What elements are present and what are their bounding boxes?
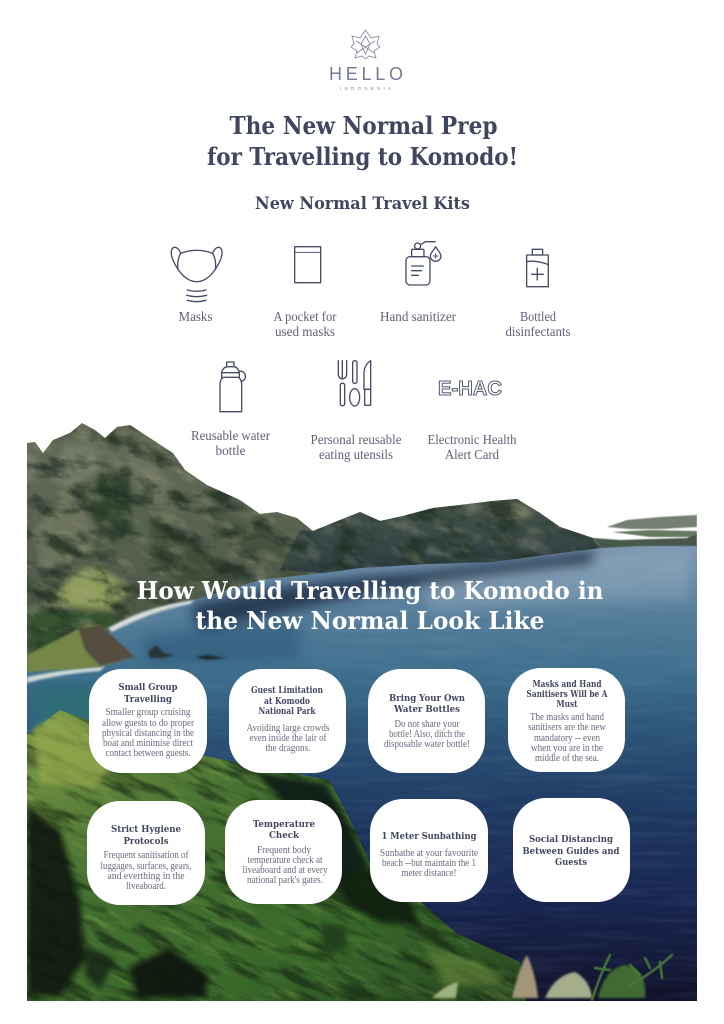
logo: Hello Indonesia xyxy=(329,30,403,91)
card: Bring Your Own Water Bottles: Bring Your Own xyxy=(389,693,465,704)
card: Bring Your Own Water Bottles xyxy=(368,669,485,773)
card: Small Group Travelling: physical distancing in the xyxy=(102,728,194,739)
water xyxy=(27,545,697,1001)
logo: Hello Indonesia: INDONESIA xyxy=(340,86,391,91)
icon: bottled disinfectant xyxy=(527,249,548,287)
heading: New Normal Travel Kits: New Normal Travel Kits xyxy=(255,194,470,213)
label: Reusable water bottle: bottle xyxy=(216,443,246,458)
card: Temperature Check: Check xyxy=(269,830,299,841)
label: Personal reusable eating utensils xyxy=(310,432,402,462)
heading: How Would Travelling to Komodo in the New Normal Look Like xyxy=(136,576,604,635)
card: Small Group Travelling: contact between guests. xyxy=(106,748,190,759)
logo: Hello Indonesia: HELLO xyxy=(329,64,403,84)
main mountain range xyxy=(27,423,600,670)
icon: eating utensils xyxy=(338,361,371,406)
label: Bottled disinfectants: disinfectants xyxy=(506,324,570,339)
card: Masks and Hand Sanitisers: Must xyxy=(556,699,578,710)
card: Social Distancing xyxy=(513,798,630,902)
label: Reusable water bottle: Reusable water xyxy=(191,428,270,443)
card: Temperature Check: Temperature xyxy=(253,819,315,830)
photo: Padar island landscape xyxy=(27,423,697,1001)
label: Electronic Health Alert Card xyxy=(428,432,517,462)
heading: How Would Travelling to Komodo in the New Normal Look Like: the New Normal Look Like xyxy=(196,606,544,635)
card: Strict Hygiene Protocols: and everthing in the xyxy=(108,871,185,882)
icon: lotus star xyxy=(351,30,380,59)
label: Hand sanitizer: Hand sanitizer xyxy=(380,309,456,324)
card: Social Distancing: Social Distancing xyxy=(529,834,613,845)
label: pocket for used masks: used masks xyxy=(275,324,335,339)
card: Small Group Travelling: boat and minimise direct xyxy=(103,738,193,749)
label: pocket for used masks: A pocket for xyxy=(274,309,337,324)
card: Guest Limitation: even inside the lair of xyxy=(250,733,327,744)
label: Bottled disinfectants xyxy=(506,309,570,339)
label: Masks: Masks xyxy=(178,309,212,324)
label: Personal reusable eating utensils: eating utensils xyxy=(319,447,393,462)
card: 1 Meter Sunbathing: 1 Meter Sunbathing xyxy=(382,831,477,842)
card: Guest Limitation: at Komodo xyxy=(264,696,310,707)
card: 1 Meter Sunbathing: Sunbathe at your favourite xyxy=(380,848,479,859)
icon: hand sanitizer xyxy=(406,242,441,285)
far islands xyxy=(593,515,697,548)
card: Temperature Check: temperature check at xyxy=(248,855,323,866)
card: Strict Hygiene Protocols: liveaboard. xyxy=(126,881,166,892)
beach xyxy=(108,600,195,632)
card: Small Group Travelling: Smaller group cruising xyxy=(106,707,190,718)
card: Masks and Hand Sanitisers xyxy=(508,668,625,772)
card: Strict Hygiene Protocols: Frequent sanitisation of xyxy=(104,850,189,861)
card: Strict Hygiene Protocols xyxy=(87,801,205,905)
card: Strict Hygiene Protocols: Protocols xyxy=(124,836,168,847)
card: Masks and Hand Sanitisers: when you are in the xyxy=(531,743,604,754)
right ridge shadow xyxy=(280,499,600,573)
mountain shading xyxy=(27,423,600,670)
card: Small Group Travelling: allow guests to do proper xyxy=(102,718,195,729)
card: Bring Your Own Water Bottles: disposable water bottle! xyxy=(384,739,470,750)
label: pocket for used masks xyxy=(274,309,337,339)
card: Small Group Travelling xyxy=(89,669,207,773)
card: Bring Your Own Water Bottles: Do not share your xyxy=(394,719,460,730)
card: Small Group Travelling: Travelling xyxy=(124,694,172,705)
title xyxy=(207,111,518,171)
label: Reusable water bottle xyxy=(191,428,270,458)
card: Temperature Check: national park's gates. xyxy=(247,875,323,886)
card: Guest Limitation xyxy=(229,669,346,773)
label: Bottled disinfectants: Bottled xyxy=(520,309,556,324)
card: 1 Meter Sunbathing xyxy=(370,799,488,902)
card: Guest Limitation: Avoiding large crowds xyxy=(246,723,330,734)
card: Temperature Check: Frequent body xyxy=(257,845,311,856)
hillside shadows and rocks xyxy=(27,716,505,998)
card: Bring Your Own Water Bottles: bottle! Also, ditch the xyxy=(389,729,465,740)
label: Electronic Health Alert Card: Alert Card xyxy=(445,447,499,462)
label: Personal reusable eating utensils: Personal reusable xyxy=(310,432,402,447)
card: Temperature Check xyxy=(225,800,342,904)
card: Masks and Hand Sanitisers: sanitisers are the new xyxy=(528,722,607,733)
card: 1 Meter Sunbathing: beach --but maintain the 1 xyxy=(382,858,476,869)
icon: E-HAC: E-HAC xyxy=(438,378,502,400)
label: Electronic Health Alert Card: Electronic Health xyxy=(428,432,517,447)
headland xyxy=(27,624,227,672)
heading: How Would Travelling to Komodo in the New Normal Look Like: How Would Travelling to Komodo in xyxy=(136,576,604,605)
card: Masks and Hand Sanitisers: Masks and Hand xyxy=(532,679,602,690)
foreground ferns xyxy=(432,955,672,1000)
card: Masks and Hand Sanitisers: The masks and hand xyxy=(530,712,604,723)
green foreground hillside xyxy=(27,710,526,1001)
card: Social Distancing: Guests xyxy=(555,857,587,868)
card: Guest Limitation: the dragons. xyxy=(266,743,310,754)
card: Strict Hygiene Protocols: luggages, surfaces, gears, xyxy=(100,861,192,872)
icon: reusable water bottle xyxy=(220,362,245,412)
card: Strict Hygiene Protocols: Strict Hygiene xyxy=(111,824,181,835)
card: Masks and Hand Sanitisers: mandatory -- even xyxy=(534,733,600,744)
icon: pocket xyxy=(295,247,321,283)
icon: mask xyxy=(171,247,222,302)
card: 1 Meter Sunbathing: meter distance! xyxy=(402,868,456,879)
card: Social Distancing: Between Guides and xyxy=(522,846,620,857)
card: Small Group Travelling: Small Group xyxy=(118,682,178,693)
card: Masks and Hand Sanitisers: middle of the sea. xyxy=(535,753,599,764)
card: Temperature Check: liveaboard and at every xyxy=(242,865,328,876)
card: Masks and Hand Sanitisers: Sanitisers Will be A xyxy=(526,689,608,700)
card: Guest Limitation: National Park xyxy=(258,706,316,717)
card: Bring Your Own Water Bottles: Water Bottles xyxy=(393,704,460,715)
title: for Travelling to Komodo! xyxy=(207,142,518,171)
title: The New Normal Prep xyxy=(230,111,498,140)
card: Guest Limitation: Guest Limitation xyxy=(251,685,323,696)
